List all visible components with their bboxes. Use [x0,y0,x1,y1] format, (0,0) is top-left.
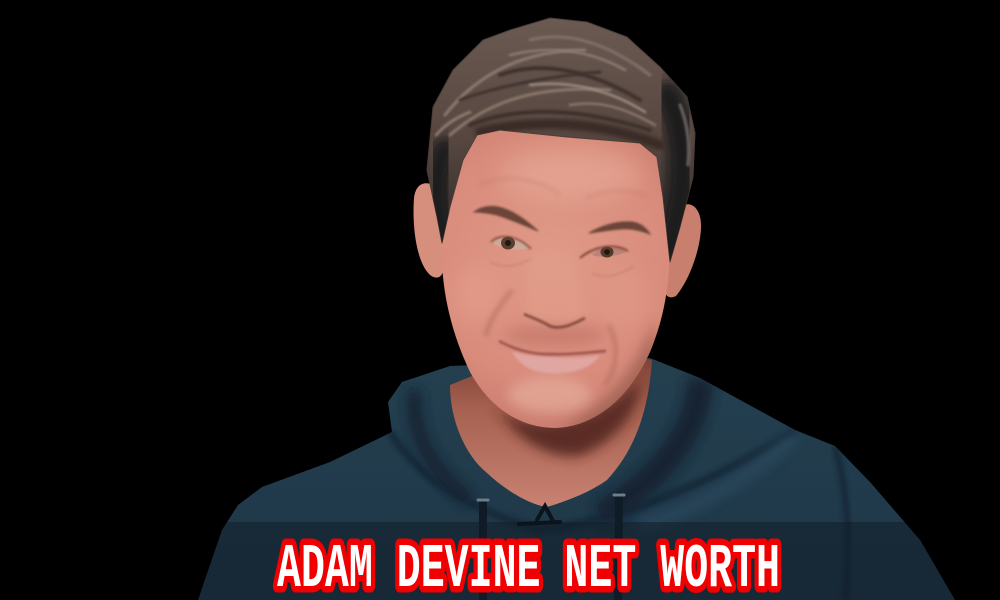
hoodie [198,358,955,600]
nose [524,255,588,327]
neck [450,340,652,507]
right eyebrow [589,222,650,234]
neck shadow under chin [495,380,640,457]
left eye [490,236,532,266]
left ear [414,183,444,278]
mouth [499,341,606,373]
hair [427,18,695,262]
face [442,120,670,432]
title band [190,522,970,600]
drawstrings and toggle [478,495,624,600]
left eyebrow [474,206,538,231]
right ear [664,204,701,297]
infographic canvas [198,18,955,600]
right eye [580,246,634,276]
